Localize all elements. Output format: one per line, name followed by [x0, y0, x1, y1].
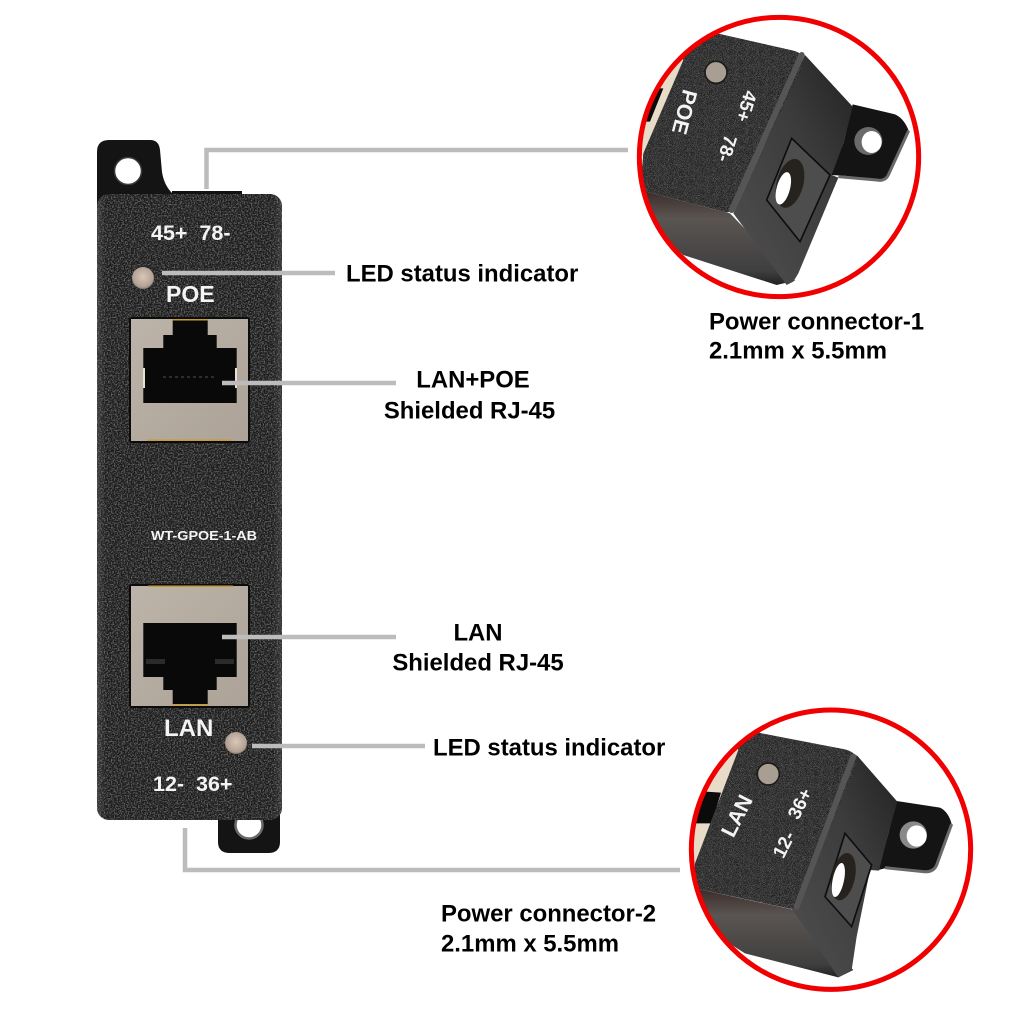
- leader line: LAN+POE jack: [222, 381, 396, 385]
- underside face: [640, 190, 795, 285]
- RJ-45 jack: LAN+POE: [129, 317, 250, 443]
- leader line: power connector 2: [185, 828, 680, 870]
- label: power connector 2: 2.1mm x 5.5mm: [441, 930, 619, 958]
- RJ-45 jack: LAN: [129, 584, 250, 708]
- marking 78-: 78-: [713, 133, 741, 165]
- jack sliver: [642, 60, 684, 156]
- led bottom: [225, 732, 247, 754]
- jack sliver: [694, 750, 738, 863]
- mounting tab bottom: [218, 815, 280, 853]
- leader line: power connector 1: [206, 150, 628, 189]
- red ring: [691, 710, 971, 989]
- marking 45+ 78-: 45+ 78-: [151, 221, 230, 245]
- label: LAN shielded RJ-45: LAN: [453, 620, 503, 646]
- label: power connector 2: Power connector-2: [441, 900, 656, 928]
- callout: power connector 2 close-up: [685, 710, 971, 989]
- label: LED status indicator (top): LED status indicator: [346, 260, 578, 288]
- red ring: [639, 17, 919, 297]
- top notch: [172, 191, 242, 197]
- marking 36+: 36+: [783, 785, 816, 822]
- led top: [132, 267, 154, 289]
- top face: [695, 720, 857, 909]
- marking 12- 36+: 12- 36+: [153, 772, 232, 796]
- label: LAN+POE shielded RJ-45: LAN+POE: [416, 366, 530, 394]
- tab hole: [854, 127, 882, 155]
- marking POE: POE: [166, 281, 215, 307]
- model number: WT-GPOE-1-AB: [151, 528, 257, 543]
- module body: [97, 194, 282, 820]
- led: [757, 763, 779, 785]
- top face: [640, 30, 804, 212]
- tab hole: [900, 821, 927, 849]
- edge highlight: [797, 757, 853, 907]
- marking 45+: 45+: [732, 88, 761, 125]
- leader line: bottom LED: [252, 744, 425, 748]
- label: power connector 1: Power connector-1: [709, 308, 924, 336]
- power jack recess: [825, 833, 872, 927]
- mounting hole bottom: [236, 812, 262, 838]
- power jack hole: [830, 853, 856, 900]
- marking LAN: LAN: [164, 715, 213, 742]
- label: power connector 1: 2.1mm x 5.5mm: [709, 338, 887, 364]
- marking POE: POE: [667, 87, 702, 137]
- label: LAN+POE shielded RJ-45: Shielded RJ-45: [384, 398, 555, 424]
- tab: [830, 104, 909, 180]
- label: LED status indicator (bottom): LED status indicator: [433, 734, 665, 762]
- product photo: PoE module front view: [97, 140, 282, 853]
- connector face: [792, 755, 897, 977]
- marking LAN: LAN: [716, 791, 758, 841]
- mounting hole top: [114, 158, 142, 184]
- tab lower rim: [838, 131, 909, 180]
- label: LAN shielded RJ-45: Shielded RJ-45: [392, 650, 564, 676]
- edge highlight: [732, 55, 802, 210]
- underside face: [695, 888, 853, 977]
- tab: [878, 801, 952, 872]
- power jack hole: [776, 158, 804, 208]
- connector face: [733, 55, 853, 285]
- callout: power connector 1 close-up: [630, 17, 919, 297]
- power jack recess: [767, 138, 830, 242]
- leader line: top LED: [162, 271, 335, 275]
- marking 12-: 12-: [768, 828, 799, 861]
- tab lower rim: [885, 824, 952, 872]
- leader line: LAN jack: [222, 635, 396, 639]
- led: [705, 61, 727, 83]
- mounting tab top: [97, 140, 172, 205]
